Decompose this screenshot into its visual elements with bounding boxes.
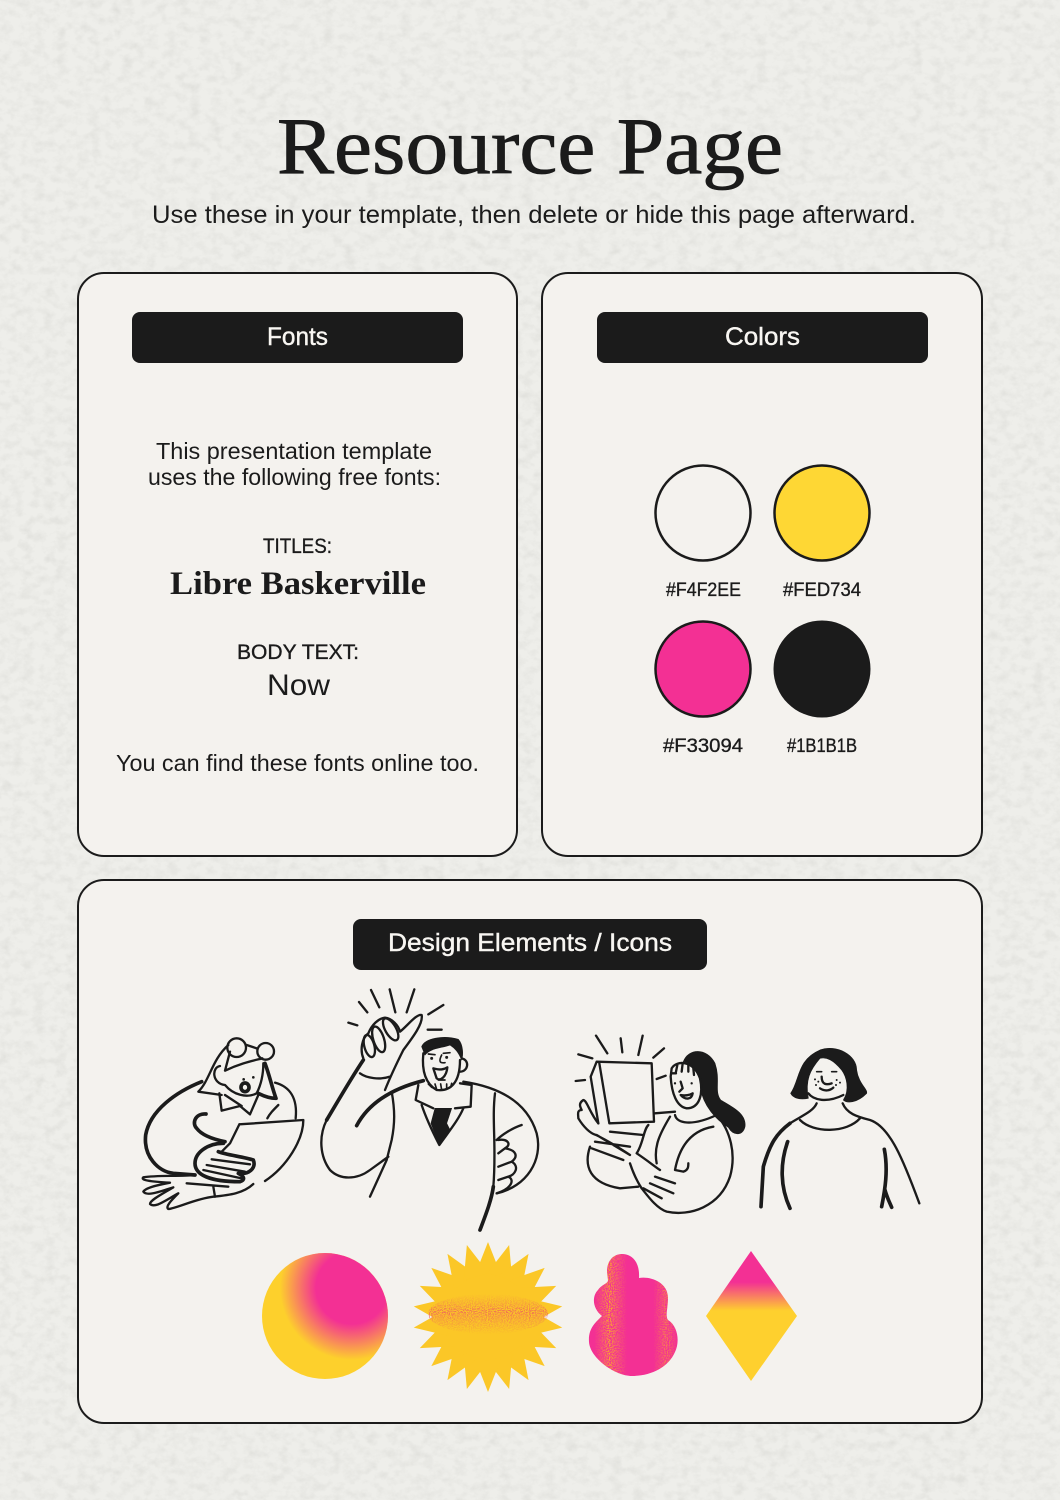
- illustration: woman reading paper: [143, 1038, 303, 1209]
- shape: gradient diamond: [706, 1251, 797, 1381]
- panel: colors: [542, 273, 982, 856]
- swatch: pink: #F33094: [663, 736, 743, 757]
- panel: design elements: [78, 880, 982, 1423]
- swatch: off white: #F4F2EE: [666, 580, 741, 601]
- heading: fonts: Fonts: [267, 323, 328, 351]
- subtitle: Use these in your template, then delete or hide this page afterward.: [152, 201, 916, 229]
- shape: pink blob: [589, 1254, 678, 1376]
- shape: yellow starburst: [412, 1241, 564, 1393]
- swatch: yellow: [774, 466, 870, 601]
- swatch: off white: [656, 466, 750, 601]
- illustration: smiling woman with freckles: [761, 1048, 919, 1208]
- heading: fonts: [132, 312, 463, 363]
- shape: gradient circle: [262, 1253, 388, 1379]
- swatch: pink: [656, 622, 750, 757]
- panel: fonts: [78, 273, 517, 856]
- closing note: You can find these fonts online too.: [116, 750, 479, 776]
- swatch: yellow: #FED734: [783, 580, 861, 601]
- title: Resource Page: [277, 103, 783, 191]
- body text label: BODY TEXT:: [237, 641, 359, 664]
- heading: colors: Colors: [725, 323, 800, 351]
- intro text: [148, 438, 441, 490]
- illustration: man pointing up: [321, 989, 538, 1230]
- titles label: TITLES:: [263, 535, 332, 558]
- swatch: black: #1B1B1B: [787, 736, 857, 757]
- illustration: woman holding box: [576, 1036, 745, 1213]
- heading: design elements: Design Elements / Icons: [388, 929, 672, 957]
- heading: colors: [597, 312, 928, 363]
- intro text: This presentation template: [156, 438, 432, 464]
- heading: design elements: [353, 919, 707, 970]
- titles font name: Libre Baskerville: [170, 566, 426, 602]
- swatch: black: [774, 620, 870, 757]
- body font name: Now: [267, 669, 330, 702]
- intro text: uses the following free fonts:: [148, 464, 441, 490]
